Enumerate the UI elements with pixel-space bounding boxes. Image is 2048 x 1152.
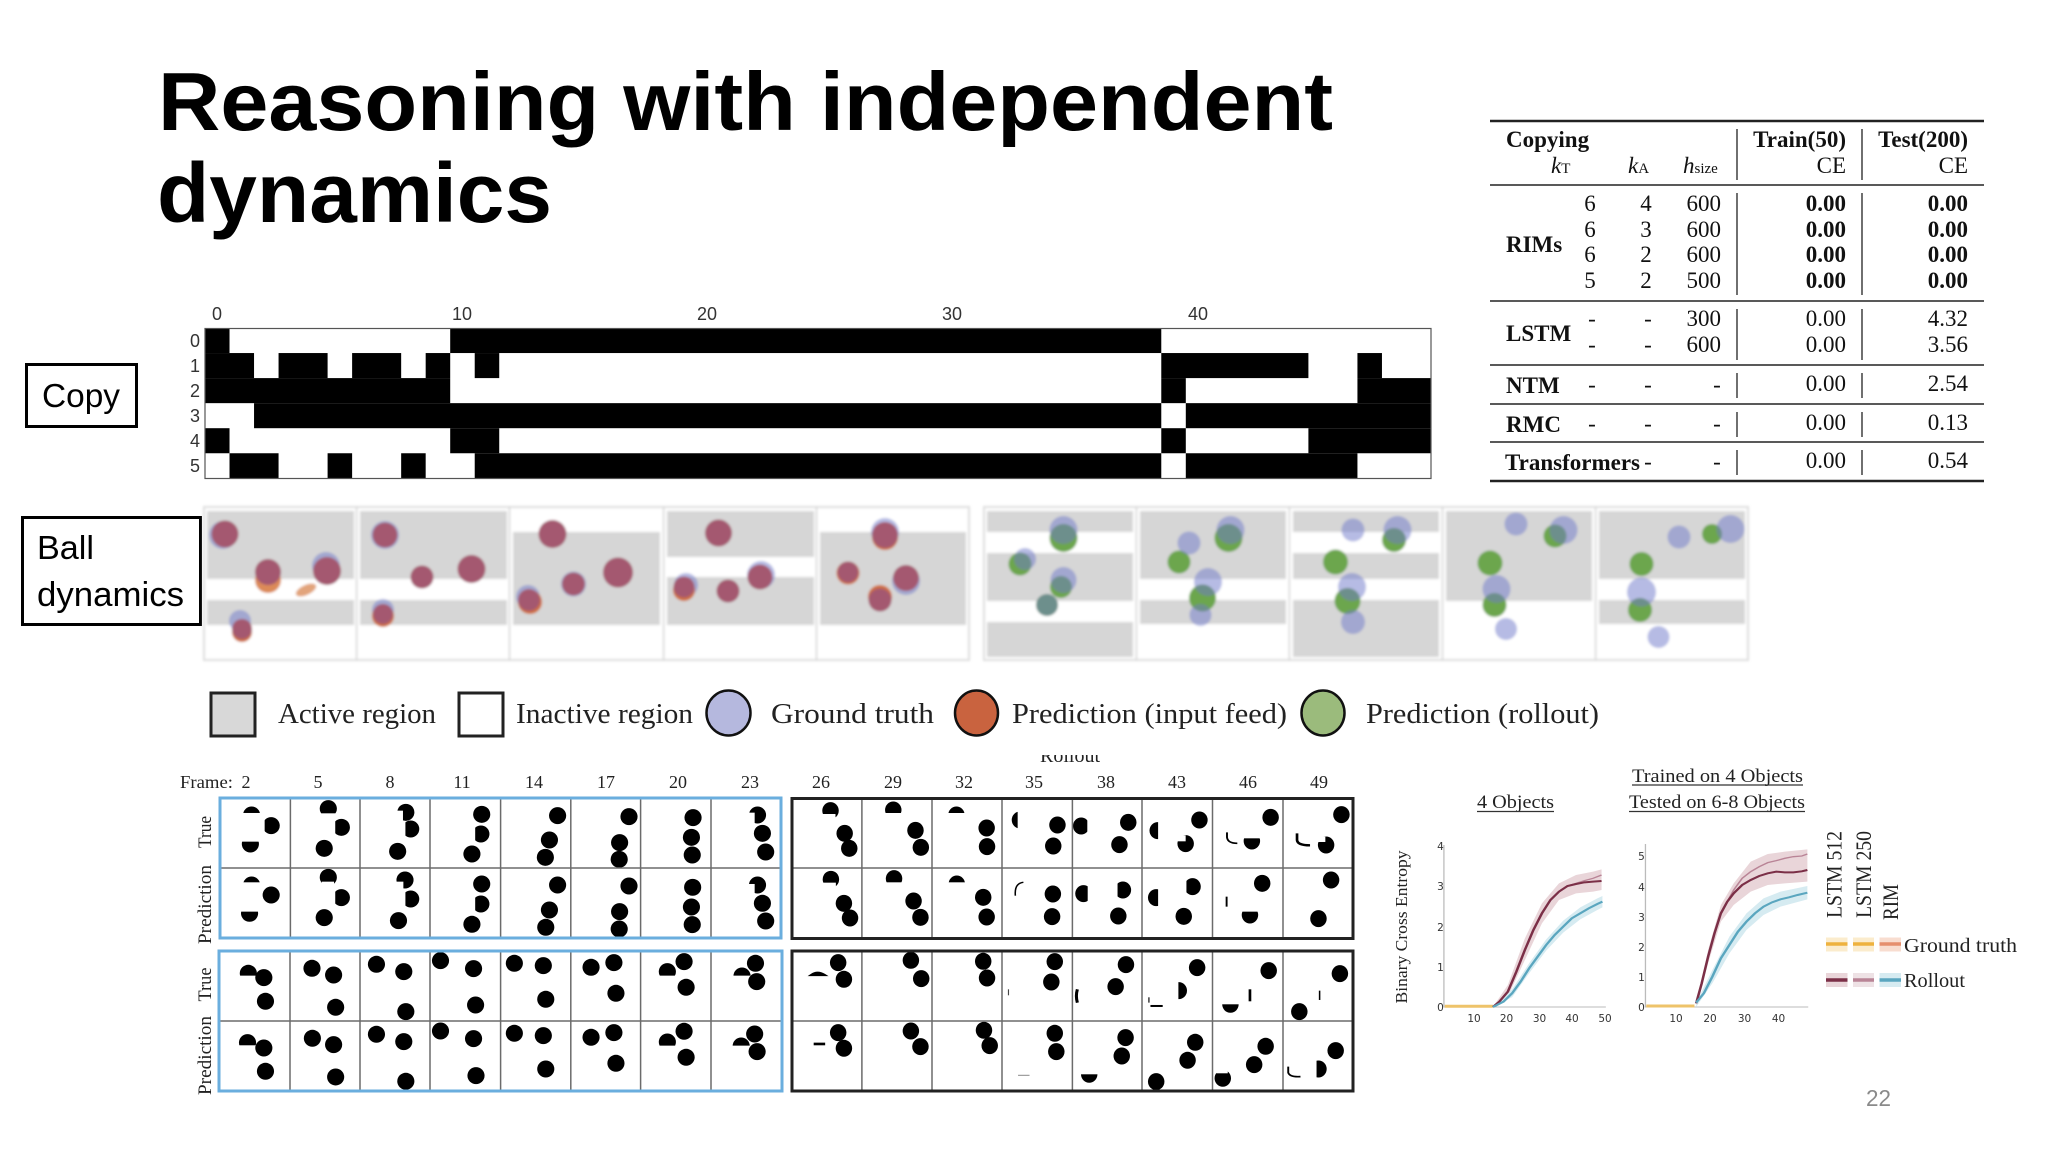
chart titles: 4 Objects <box>1477 792 1554 813</box>
table rows: RIMs: 0.00 <box>1928 191 1968 216</box>
matrix row tick labels: 2 <box>190 381 200 401</box>
frame grid: input feed (blue) <box>219 798 782 1091</box>
frame grid: rollout (black) <box>792 798 1353 1091</box>
table header: Copying <box>1506 127 1590 152</box>
table rows: RIMs: 0.00 <box>1928 268 1968 293</box>
legend: inactive region <box>459 693 693 736</box>
legend row: rollout <box>1826 970 1965 992</box>
table row: NTM <box>1506 371 1968 398</box>
legend row: rollout: Rollout <box>1904 970 1965 992</box>
frame 4 <box>667 511 814 625</box>
frame number labels: 14 <box>525 772 543 792</box>
table row: Transformers: - <box>1713 449 1721 474</box>
frame number labels: 11 <box>453 772 471 792</box>
right chart tick labels: 10 <box>1669 1013 1683 1025</box>
blue grid frames <box>220 798 781 938</box>
table row: RMC: 0.00 <box>1806 410 1846 435</box>
table header: Test(200) <box>1878 127 1968 152</box>
title: dynamics <box>157 146 552 240</box>
table row: Transformers: Transformers <box>1505 450 1640 475</box>
clipped Rollout heading: Rollout <box>1040 745 1100 767</box>
left chart tick labels: 30 <box>1533 1013 1546 1025</box>
frame number labels: 29 <box>884 772 902 792</box>
rollout frame 5 <box>1599 511 1745 648</box>
table rows: RIMs: 3 <box>1640 217 1652 242</box>
rollout frame 4 <box>1446 511 1592 640</box>
title <box>157 55 1333 240</box>
left chart tick labels: 2 <box>1437 922 1444 934</box>
legend column headers: LSTM 250 <box>1851 831 1876 918</box>
matrix row tick labels <box>190 331 200 476</box>
blue grid balls <box>237 800 774 1090</box>
matrix column tick labels: 20 <box>697 304 717 324</box>
table row: NTM: - <box>1713 372 1721 397</box>
table rows: LSTM: 0.00 <box>1806 332 1846 357</box>
page number: 22 <box>1866 1085 1891 1111</box>
table row: NTM: 2.54 <box>1928 371 1968 396</box>
frame number labels: 8 <box>386 772 394 792</box>
frame 3 <box>513 520 660 625</box>
legend: prediction rollout: Prediction (rollout) <box>1366 699 1599 730</box>
legend: prediction rollout <box>1302 690 1599 736</box>
matrix row tick labels: 5 <box>190 456 200 476</box>
right chart bands <box>1696 849 1807 1007</box>
frame 1 <box>207 511 354 642</box>
frame dividers <box>357 507 816 660</box>
right chart tick labels: 4 <box>1638 882 1645 894</box>
row labels: Prediction <box>195 1016 216 1095</box>
left chart tick labels: 10 <box>1467 1013 1481 1025</box>
table rows: RIMs: 500 <box>1686 268 1721 293</box>
row labels: Prediction <box>195 865 216 944</box>
frame 2 <box>360 511 507 627</box>
matrix row tick labels: 0 <box>190 331 200 351</box>
matrix row tick labels: 3 <box>190 406 200 426</box>
table rows: LSTM: LSTM <box>1506 321 1571 346</box>
table header: kA <box>1628 153 1649 178</box>
frame number labels: 46 <box>1239 772 1257 792</box>
table row: RMC: RMC <box>1506 412 1561 437</box>
frame number labels <box>180 772 1328 792</box>
right chart tick labels: 40 <box>1772 1013 1785 1025</box>
copy task binary matrix <box>190 304 1431 478</box>
table header: kT <box>1551 153 1570 178</box>
frame number labels: 2 <box>242 772 250 792</box>
y axis label: Binary Cross Entropy <box>1392 850 1411 1003</box>
table rows: LSTM: - <box>1644 306 1652 331</box>
matrix column tick labels: 30 <box>942 304 962 324</box>
matrix row tick labels: 1 <box>190 356 200 376</box>
legend <box>211 690 1599 736</box>
table row: Transformers: 0.54 <box>1928 448 1968 473</box>
row labels: True <box>195 816 216 848</box>
table rows: RIMs: 0.00 <box>1928 217 1968 242</box>
matrix column tick labels: 0 <box>212 304 222 324</box>
right chart tick labels <box>1638 851 1785 1025</box>
title: Reasoning with independent <box>158 55 1333 148</box>
frame number labels: 5 <box>314 772 322 792</box>
legend: prediction input feed <box>955 690 1287 736</box>
table rows: RIMs <box>1506 191 1968 293</box>
left chart tick labels: 0 <box>1437 1002 1444 1014</box>
chart titles <box>1477 766 1805 813</box>
table rows: RIMs: 0.00 <box>1806 191 1846 216</box>
frame number labels: 49 <box>1310 772 1328 792</box>
label box: Ball dynamics <box>22 518 200 624</box>
table rows: LSTM: - <box>1588 332 1596 357</box>
matrix column tick labels: 10 <box>452 304 472 324</box>
legend column headers: LSTM 512 <box>1822 831 1846 918</box>
label box: Copy: Copy <box>42 377 120 414</box>
left chart bands <box>1493 869 1602 1007</box>
table header: CE <box>1939 153 1968 178</box>
table header <box>1506 127 1968 178</box>
rollout frame 2 <box>1140 511 1286 626</box>
table row: RMC: 0.13 <box>1928 410 1968 435</box>
matrix column tick labels: 40 <box>1188 304 1208 324</box>
right chart tick labels: 2 <box>1638 942 1645 954</box>
table row: Transformers: 0.00 <box>1806 448 1846 473</box>
table rows: RIMs: 0.00 <box>1806 217 1846 242</box>
matrix column tick labels <box>212 304 1208 324</box>
table rows: RIMs: 600 <box>1686 242 1721 267</box>
table row: RMC: - <box>1644 411 1652 436</box>
left chart tick labels <box>1437 841 1612 1025</box>
label box: Copy <box>26 364 136 426</box>
left chart tick labels: 50 <box>1598 1013 1612 1025</box>
table row: RMC <box>1506 410 1968 437</box>
table rows: RIMs: 4 <box>1640 191 1652 216</box>
table rows: LSTM <box>1506 306 1968 357</box>
right chart tick labels: 5 <box>1638 851 1645 863</box>
legend row: ground truth: Ground truth <box>1904 935 2017 957</box>
matrix row tick labels: 4 <box>190 431 200 451</box>
table rows: LSTM: - <box>1644 332 1652 357</box>
table rows: RIMs: 600 <box>1686 217 1721 242</box>
row labels: True <box>195 968 216 1002</box>
table header: CE <box>1817 153 1846 178</box>
right chart tick labels: 30 <box>1738 1013 1751 1025</box>
rollout frame 3 <box>1293 511 1439 657</box>
chart titles: Tested on 6-8 Objects <box>1629 792 1805 813</box>
table rows: RIMs: 0.00 <box>1806 242 1846 267</box>
line chart: 6-8 objects <box>1638 844 1808 1025</box>
frame 5 <box>820 518 966 625</box>
left chart tick labels: 4 <box>1437 841 1444 853</box>
ball dynamics: rollout frames <box>984 507 1748 660</box>
legend: ground truth: Ground truth <box>771 699 934 730</box>
legend: inactive region: Inactive region <box>516 699 693 730</box>
black grid balls <box>811 801 1350 1090</box>
table rows: LSTM: - <box>1588 306 1596 331</box>
table row: NTM: - <box>1644 372 1652 397</box>
frame number labels: Frame: <box>180 772 233 792</box>
black grid frames <box>792 798 1353 938</box>
table rows: RIMs: 2 <box>1640 242 1652 267</box>
row labels <box>195 816 216 1095</box>
table header: Train(50) <box>1753 127 1846 152</box>
rollout frame 1 <box>987 511 1133 657</box>
right chart tick labels: 3 <box>1638 912 1645 924</box>
legend: active region: Active region <box>278 699 436 730</box>
frame number labels: 35 <box>1025 772 1043 792</box>
table row: RMC: - <box>1713 411 1721 436</box>
legend column headers <box>1822 831 1903 920</box>
table rows: RIMs: 2 <box>1640 268 1652 293</box>
matrix cells <box>205 328 1431 478</box>
table rows: LSTM: 4.32 <box>1928 306 1968 331</box>
black grid lines <box>792 798 1353 1091</box>
table row: NTM: NTM <box>1506 373 1560 398</box>
table rows: LSTM: 600 <box>1686 332 1721 357</box>
table rows: RIMs: 6 <box>1584 242 1596 267</box>
table row: RMC: - <box>1588 411 1596 436</box>
left chart tick labels: 20 <box>1500 1013 1513 1025</box>
right chart tick labels: 0 <box>1638 1002 1645 1014</box>
legend: prediction input feed: Prediction (input feed) <box>1012 699 1287 730</box>
table rules <box>1490 121 1984 481</box>
frame number labels: 38 <box>1097 772 1115 792</box>
table row: NTM: - <box>1588 372 1596 397</box>
chart titles: Trained on 4 Objects <box>1632 766 1803 787</box>
chart legend <box>1822 831 2017 992</box>
rollout frame dividers <box>1136 507 1596 660</box>
table rows: RIMs: 600 <box>1686 191 1721 216</box>
frame number labels: 20 <box>669 772 687 792</box>
legend: active region <box>211 693 436 736</box>
right chart tick labels: 1 <box>1638 972 1645 984</box>
left chart tick labels: 3 <box>1437 881 1444 893</box>
table rows: RIMs: 6 <box>1584 191 1596 216</box>
results table <box>1490 121 1984 481</box>
legend row: ground truth <box>1826 935 2017 957</box>
table rows: RIMs: 5 <box>1584 268 1596 293</box>
table rows: RIMs: 6 <box>1584 217 1596 242</box>
label box: Ball dynamics: dynamics <box>37 576 184 614</box>
frame number labels: 23 <box>741 772 759 792</box>
legend: ground truth <box>706 690 934 736</box>
table rows: LSTM: 0.00 <box>1806 306 1846 331</box>
table rows: RIMs: 0.00 <box>1928 242 1968 267</box>
frame number labels: 32 <box>955 772 973 792</box>
table row: Transformers: - <box>1644 449 1652 474</box>
left chart tick labels: 1 <box>1437 962 1444 974</box>
blue grid lines <box>220 798 782 1091</box>
table rows: LSTM: 3.56 <box>1928 332 1968 357</box>
legend column headers: RIM <box>1878 884 1903 920</box>
frame number labels: 26 <box>812 772 830 792</box>
table row: NTM: 0.00 <box>1806 371 1846 396</box>
left chart tick labels: 40 <box>1565 1013 1579 1025</box>
table header: hsize <box>1683 153 1718 178</box>
line chart: 4 objects <box>1437 841 1612 1025</box>
table row: Transformers <box>1505 448 1968 475</box>
label box: Ball dynamics: Ball <box>37 529 94 566</box>
right chart tick labels: 20 <box>1703 1013 1717 1025</box>
frame number labels: 43 <box>1168 772 1186 792</box>
table rows: RIMs: 0.00 <box>1806 268 1846 293</box>
table rows: LSTM: 300 <box>1686 306 1721 331</box>
frame number labels: 17 <box>597 772 615 792</box>
table rows: RIMs: RIMs <box>1506 232 1562 257</box>
ball dynamics: input feed frames <box>204 507 969 660</box>
